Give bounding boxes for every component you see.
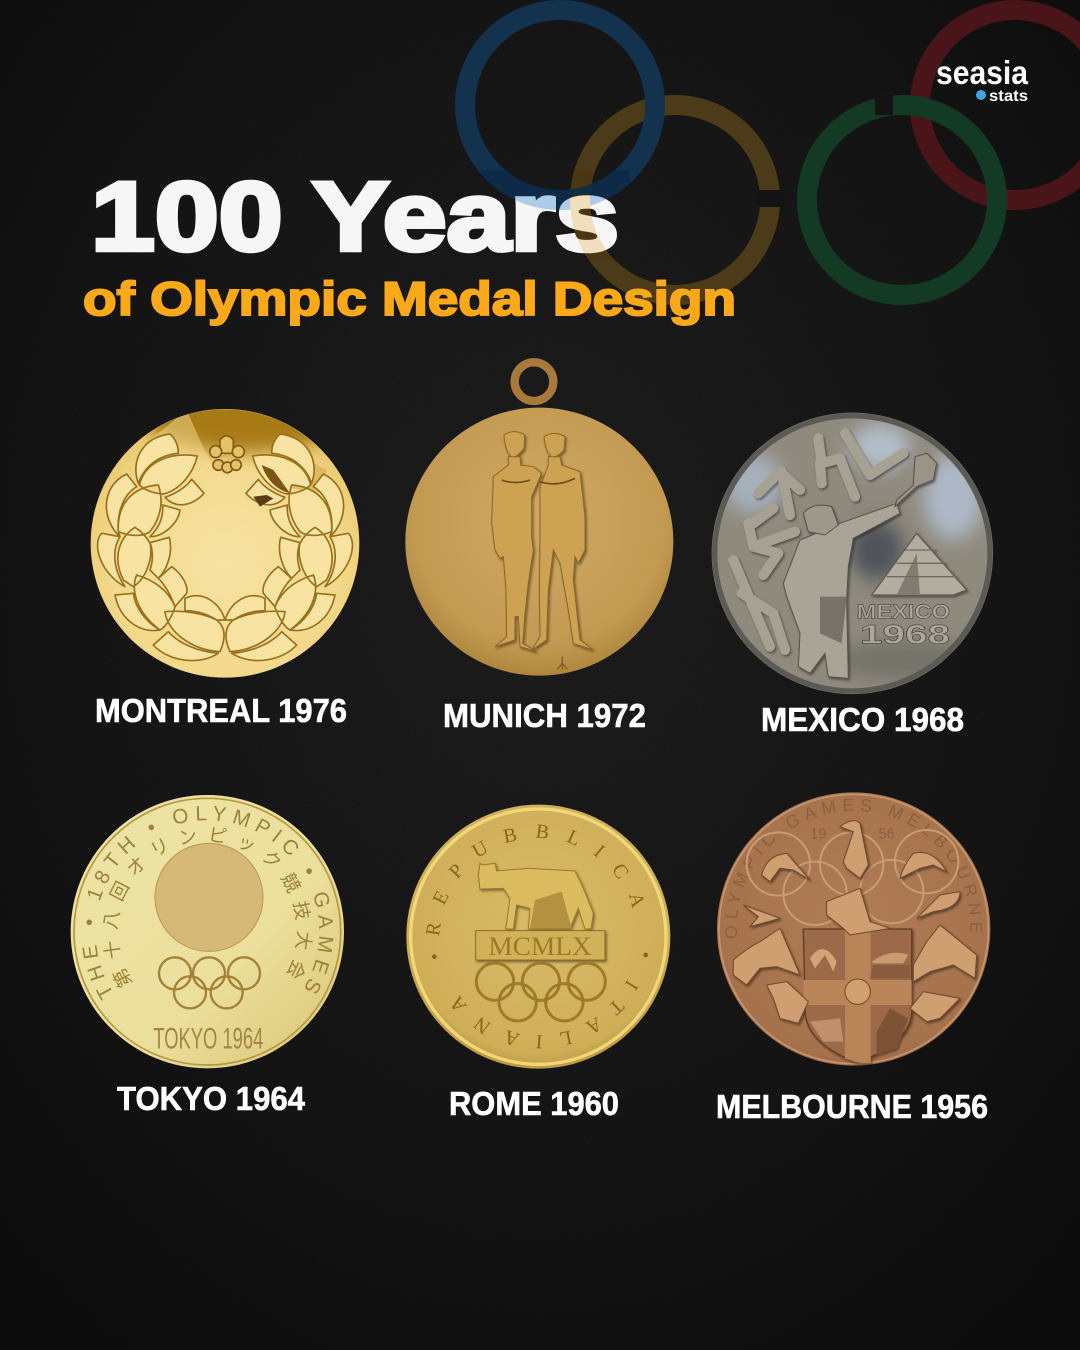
medal: Melbourne 1956: 56 (879, 826, 895, 842)
logo: seasia stats: stats (989, 88, 1028, 105)
medal: Munich 1972 (405, 362, 673, 676)
label: Montreal 1976: MONTREAL 1976 (95, 692, 347, 729)
medal: Melbourne 1956: OLYMPIC GAMES MELBOURNE (725, 799, 982, 938)
logo: seasia stats: seasia (936, 54, 1029, 91)
medal: Montreal 1976 (91, 380, 359, 678)
medal: Tokyo 1964 (70, 795, 344, 1068)
label: Melbourne 1956: MELBOURNE 1956 (716, 1088, 988, 1125)
title (83, 162, 736, 325)
medal: Rome 1960 (406, 804, 670, 1069)
medal: Rome 1960: MCMLX (488, 932, 592, 961)
label: Rome 1960: ROME 1960 (449, 1085, 619, 1122)
logo: seasia stats (936, 54, 1029, 105)
medal: Melbourne 1956 (717, 792, 990, 1066)
medal: Rome 1960: ITALIANA (452, 980, 638, 1048)
label: Mexico 1968: MEXICO 1968 (761, 701, 964, 738)
olympic rings backdrop (465, 10, 1080, 295)
medal: Rome 1960: REPUBBLICA (426, 824, 644, 936)
medal: Tokyo 1964: THE • 18TH • OLYMPIC • GAMES (82, 806, 334, 1000)
subtitle: of Olympic Medal Design (83, 272, 736, 325)
medal: Mexico 1968: 1968 (860, 619, 950, 649)
title: 100 Years (91, 162, 619, 271)
label: Munich 1972: MUNICH 1972 (443, 697, 646, 734)
medal: Tokyo 1964: TOKYO 1964 (153, 1022, 263, 1055)
medal: Mexico 1968: MEXICO (857, 601, 950, 623)
medal: Mexico 1968 (712, 413, 993, 694)
medal: Tokyo 1964: 第十八回オリンピック競技大会 (103, 827, 313, 988)
label: Tokyo 1964: TOKYO 1964 (117, 1080, 306, 1117)
medal: Melbourne 1956: 19 (810, 826, 826, 842)
